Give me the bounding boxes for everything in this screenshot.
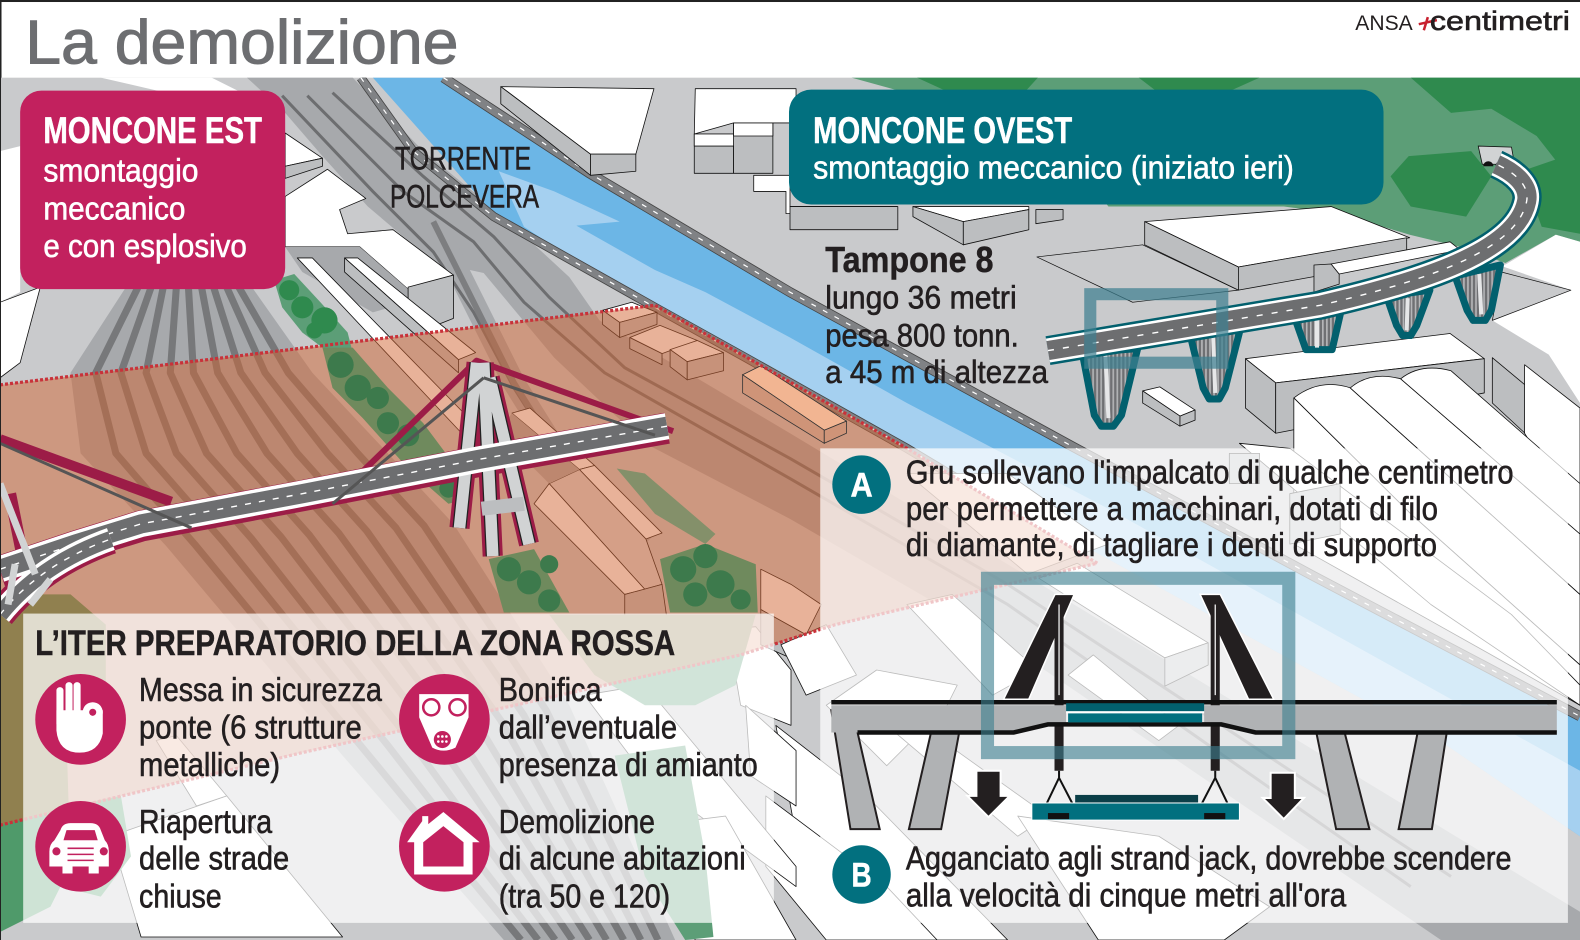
hangar roofs xyxy=(1294,368,1580,705)
left pylon xyxy=(0,484,50,605)
buildings: lower right under panel xyxy=(766,443,1580,940)
deck outlines xyxy=(831,702,1557,732)
icon: house xyxy=(399,801,490,892)
text: bonifica xyxy=(499,672,758,784)
tree cluster: north bright xyxy=(274,274,353,353)
text block: tampone 8 xyxy=(825,239,1048,390)
text: step B xyxy=(906,840,1511,915)
text: messa in sicurezza: Messa in sicurezza xyxy=(139,672,382,709)
badge B xyxy=(832,845,891,904)
text: demolizione: Demolizione xyxy=(499,804,655,841)
buildings: lower centre xyxy=(0,287,857,940)
badge A xyxy=(832,455,891,514)
tree cluster: central dark xyxy=(322,348,469,504)
icon: hand xyxy=(35,674,126,765)
panel: iter preparatorio xyxy=(23,614,774,923)
text: bonifica: dall’eventuale xyxy=(499,710,677,746)
strand jack cables xyxy=(1059,605,1215,771)
text: bonifica: Bonifica xyxy=(499,672,602,709)
deck left xyxy=(831,705,1066,732)
badge A: A xyxy=(850,467,873,505)
text: riapertura xyxy=(139,804,289,916)
icon: car xyxy=(35,801,126,892)
rail corridor xyxy=(247,78,1580,940)
logo: ANSA centimetri xyxy=(1355,5,1570,36)
green hillside xyxy=(851,78,1580,263)
label: torrente polcevera: POLCEVERA xyxy=(390,179,539,215)
text: riapertura: Riapertura xyxy=(139,804,272,841)
panel: moncone ovest: MONCONE OVEST xyxy=(813,109,1072,151)
piers xyxy=(1082,265,1500,426)
arrow: left down xyxy=(967,771,1010,817)
green strips under the panels xyxy=(0,594,756,940)
logo: ANSA centimetri: centimetri xyxy=(1430,5,1570,36)
darker vegetation patches xyxy=(917,78,1580,234)
panel: moncone est: MONCONE EST xyxy=(43,109,262,151)
text block: tampone 8: pesa 800 tonn. xyxy=(825,318,1019,354)
rail tracks xyxy=(282,93,1451,887)
deck right xyxy=(1204,705,1557,732)
panel heading: L’ITER PREPARATORIO DELLA ZONA ROSSA xyxy=(35,624,675,663)
crimson stump outline xyxy=(0,361,673,615)
tree cluster: east bank xyxy=(617,468,758,613)
pier highlights xyxy=(1105,274,1481,418)
viaduct deck xyxy=(1048,164,1527,351)
tree cluster: south of pylon xyxy=(489,549,569,613)
text: riapertura: delle strade xyxy=(139,840,289,877)
piers xyxy=(831,710,1450,829)
icon: gas mask xyxy=(399,674,490,765)
trees along the rail yard xyxy=(274,274,758,613)
text: step A: di diamante, di tagliare i denti di supporto xyxy=(906,527,1437,564)
deck xyxy=(0,426,667,615)
red zone overlay xyxy=(0,305,1097,825)
badge B: B xyxy=(851,857,872,895)
panel: moncone ovest xyxy=(789,90,1384,205)
riverside blocks xyxy=(603,302,723,380)
riverside roads xyxy=(361,78,1580,716)
text: step B: alla velocità di cinque metri all'ora xyxy=(906,878,1347,915)
text block: tampone 8: lungo 36 metri xyxy=(825,279,1017,315)
rail yard fan xyxy=(71,287,675,940)
hooks xyxy=(1047,771,1227,803)
title: La demolizione xyxy=(25,7,458,77)
bridge: east stump xyxy=(0,361,673,615)
text block: tampone 8: a 45 m di altezza xyxy=(825,354,1048,390)
text: messa in sicurezza: ponte (6 strutture xyxy=(139,710,362,746)
panel: moncone ovest: smontaggio meccanico (iniziato ieri) xyxy=(813,149,1294,185)
label: torrente polcevera xyxy=(390,140,539,215)
main pylon xyxy=(459,363,529,556)
text block: tampone 8: Tampone 8 xyxy=(825,239,994,280)
panel: moncone est: e con esplosivo xyxy=(43,228,247,264)
panel: moncone est xyxy=(20,91,285,289)
buildings: upper right xyxy=(1036,206,1580,483)
buildings: top centre xyxy=(501,87,1063,245)
tampone highlight frame xyxy=(1090,294,1222,363)
text: demolizione: di alcune abitazioni xyxy=(499,840,746,877)
torrente river xyxy=(373,78,1580,836)
text: demolizione: (tra 50 e 120) xyxy=(499,879,670,916)
cable stays xyxy=(0,378,655,528)
text: step A: per permettere a macchinari, dotati di filo xyxy=(906,491,1438,528)
label: torrente polcevera: TORRENTE xyxy=(395,140,531,176)
red zone dotted boundary xyxy=(0,305,1097,825)
bridge section diagram xyxy=(831,578,1557,829)
text: bonifica: presenza di amianto xyxy=(499,747,758,784)
cut segment in place xyxy=(1066,703,1204,722)
text: messa in sicurezza xyxy=(139,672,382,784)
peach building on the river xyxy=(743,366,846,443)
arrow: right down xyxy=(1263,773,1304,819)
text: step A xyxy=(906,455,1513,564)
lowered segment xyxy=(1032,795,1239,820)
text: messa in sicurezza: metalliche) xyxy=(139,747,280,784)
panel: moncone est: meccanico xyxy=(43,191,185,227)
text: riapertura: chiuse xyxy=(139,879,222,916)
pylons xyxy=(1004,594,1074,699)
logo: ANSA centimetri: ANSA xyxy=(1355,12,1414,35)
panel: demolition steps xyxy=(820,448,1568,923)
bridge: west stump xyxy=(1048,146,1527,426)
text: demolizione xyxy=(499,804,746,916)
frame xyxy=(988,578,1289,753)
tunnel portal xyxy=(1478,146,1515,166)
buildings: upper left xyxy=(0,78,667,625)
panel: moncone est: smontaggio xyxy=(43,152,199,188)
